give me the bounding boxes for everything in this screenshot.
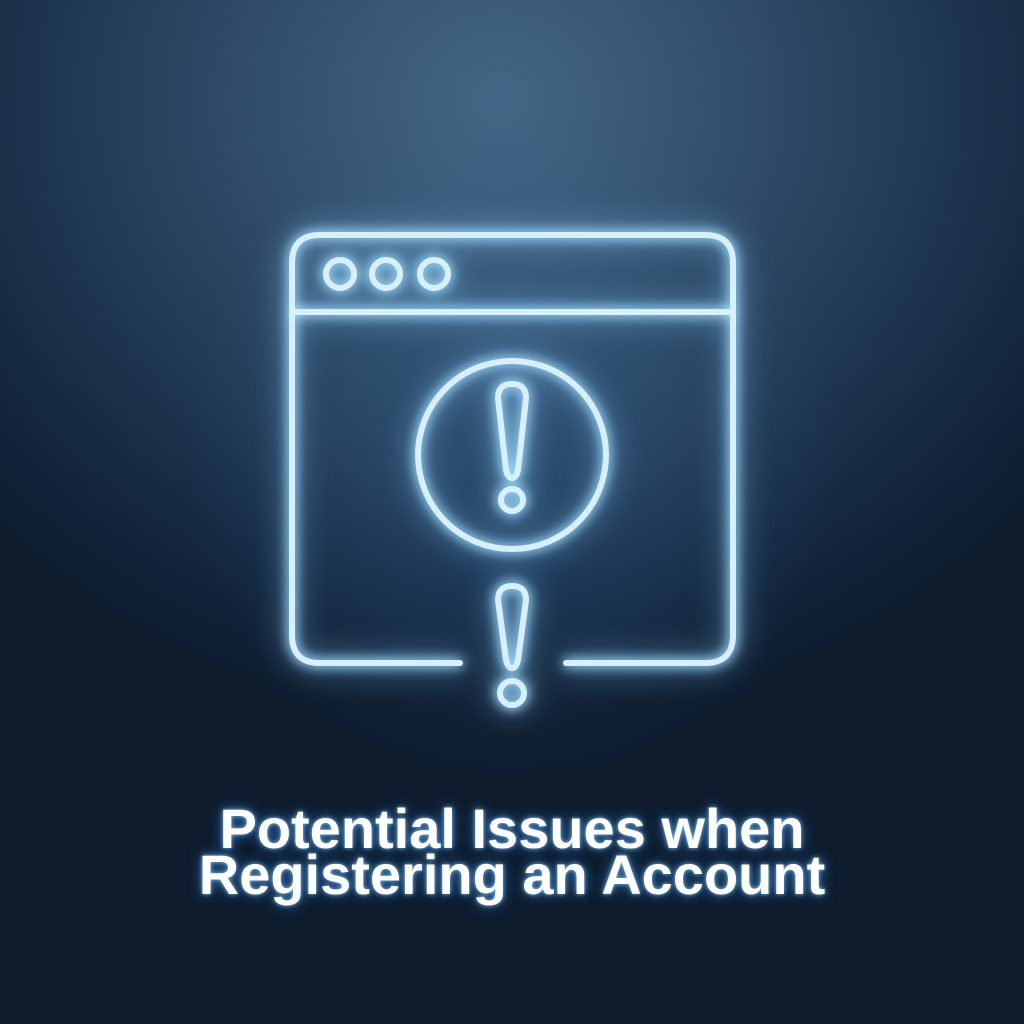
title: Potential Issues when	[219, 797, 805, 860]
warning circle with exclamation	[418, 361, 606, 549]
window frame	[292, 235, 733, 663]
window buttons	[326, 260, 448, 288]
title: Registering an Account	[199, 843, 825, 906]
lower exclamation	[498, 586, 526, 705]
title	[192, 797, 830, 914]
